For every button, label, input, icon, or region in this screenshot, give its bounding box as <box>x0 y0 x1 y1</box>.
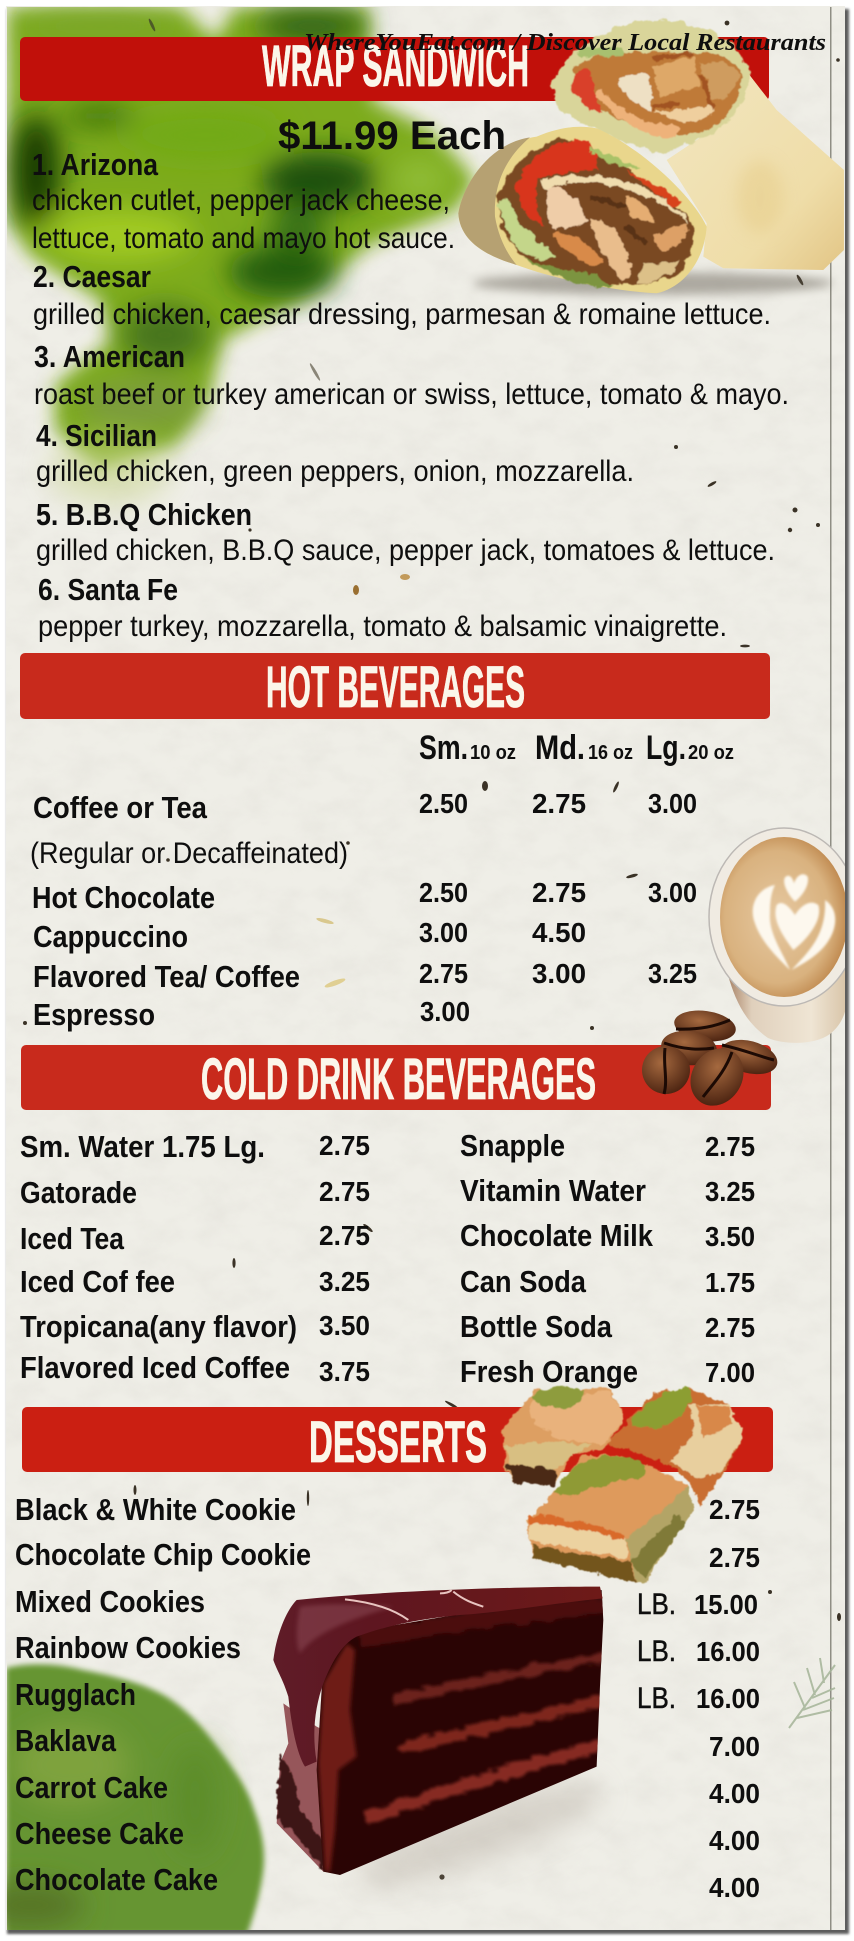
price: $11.99 each: $11.99 Each <box>278 114 506 158</box>
list: cold drinks left column: Tropicana(any flavor) <box>20 1309 297 1344</box>
item 1 description: chicken cutlet, pepper jack cheese, <box>32 184 450 217</box>
list: desserts prices: 15.00 <box>694 1589 758 1620</box>
item 4 name: 4. Sicilian <box>36 418 157 453</box>
row: hot chocolate <box>32 877 697 915</box>
list: desserts names: Cheese Cake <box>15 1816 184 1851</box>
list: cold drinks right column <box>460 1128 755 1389</box>
note: regular or decaf: (Regular or Decaffeinated) <box>30 837 348 870</box>
list: cold drinks left column: 2.75 <box>319 1220 370 1251</box>
front wrap filling <box>497 138 694 287</box>
table: hot beverages <box>30 788 697 1032</box>
watermark: WhereYouEat.com / Discover Local Restaurants <box>304 30 826 56</box>
item 4 description: grilled chicken, green peppers, onion, mozzarella. <box>36 455 634 488</box>
list: cold drinks right column: 2.75 <box>705 1131 755 1162</box>
front piece <box>527 1455 693 1583</box>
image: two wraps <box>458 20 844 295</box>
list: cold drinks right column: Fresh Orange <box>460 1354 638 1389</box>
list: desserts names: Rugglach <box>15 1677 136 1712</box>
list: cold drinks right column: 3.25 <box>705 1176 755 1207</box>
table header: sizes: Lg. <box>646 729 686 767</box>
banner: hot beverages <box>20 653 770 720</box>
table header: sizes <box>419 729 734 767</box>
list: cold drinks right column: Bottle Soda <box>460 1309 613 1344</box>
list: cold drinks left column: 3.75 <box>319 1356 370 1387</box>
row: cappuccino <box>33 917 586 954</box>
cake side face <box>277 1703 337 1872</box>
banner: desserts <box>22 1407 773 1475</box>
icing <box>273 1587 603 1767</box>
list: desserts names: Chocolate Cake <box>15 1862 218 1897</box>
list: wrap sandwich items <box>32 147 789 643</box>
base leaf shape <box>8 8 475 470</box>
row: flavored tea: 3.00 <box>532 958 586 989</box>
list: cold drinks right column: 3.50 <box>705 1221 755 1252</box>
table header: sizes: Md. <box>535 729 585 767</box>
image: coffee cup <box>709 828 854 1043</box>
row: flavored tea <box>33 958 697 994</box>
row: coffee or tea: 2.50 <box>419 788 468 819</box>
list: cold drinks left column: Flavored Iced Coffee <box>20 1350 290 1385</box>
table header: sizes: 10 oz <box>470 742 516 764</box>
back wrap body <box>667 73 844 270</box>
back wrap filling <box>552 20 750 154</box>
list: cold drinks left column: 2.75 <box>319 1130 370 1161</box>
row: espresso <box>33 996 470 1032</box>
item 5 description: grilled chicken, B.B.Q sauce, pepper jack, tomatoes & lettuce. <box>36 534 775 567</box>
item 6 name: 6. Santa Fe <box>38 572 178 607</box>
table header: sizes: 16 oz <box>588 742 633 764</box>
row: cappuccino: 3.00 <box>419 917 468 948</box>
list: cold drinks right column: Snapple <box>460 1128 565 1163</box>
list: cold drinks left column: 3.50 <box>319 1310 370 1341</box>
image: baklava <box>502 1387 745 1583</box>
row: hot chocolate: 2.50 <box>419 877 468 908</box>
list: cold drinks left column: Gatorade <box>20 1175 137 1210</box>
item 2 description: grilled chicken, caesar dressing, parmesan & romaine lettuce. <box>33 298 771 331</box>
green blurred leaf background, bottom left <box>0 1664 264 1935</box>
list: desserts prices: 2.75 <box>709 1542 760 1573</box>
left piece <box>502 1387 625 1486</box>
banner: wrap sandwich: WRAP SANDWICH <box>262 34 529 99</box>
item 1 name: 1. Arizona <box>32 147 159 182</box>
row: coffee or tea <box>33 788 697 825</box>
item 1 description: lettuce, tomato and mayo hot sauce. <box>32 222 455 255</box>
row: coffee or tea: 2.75 <box>532 788 586 819</box>
list: desserts prices: LB. <box>637 1588 676 1621</box>
row: flavored tea: 2.75 <box>419 958 468 989</box>
image: coffee beans <box>642 1007 781 1116</box>
row: espresso: 3.00 <box>420 996 470 1027</box>
row: cappuccino: Cappuccino <box>33 919 188 954</box>
list: cold drinks right column: Vitamin Water <box>460 1173 646 1208</box>
row: espresso: Espresso <box>33 997 155 1032</box>
row: hot chocolate: Hot Chocolate <box>32 880 215 915</box>
cake front face <box>317 1590 603 1875</box>
table header: sizes: Sm. <box>419 729 468 767</box>
table header: sizes: 20 oz <box>688 742 734 764</box>
list: cold drinks left column: Iced Cof fee <box>20 1264 175 1299</box>
list: desserts names: Chocolate Chip Cookie <box>15 1537 311 1572</box>
right piece <box>607 1388 745 1507</box>
banner: cold drink beverages <box>21 1045 771 1112</box>
list: desserts names <box>15 1492 311 1897</box>
list: desserts prices: 2.75 <box>709 1494 760 1525</box>
row: coffee or tea: 3.00 <box>648 788 697 819</box>
list: desserts prices: 7.00 <box>709 1731 760 1762</box>
list: desserts names: Mixed Cookies <box>15 1584 205 1619</box>
list: cold drinks right column: 7.00 <box>705 1357 755 1388</box>
row: cappuccino: 4.50 <box>532 917 586 948</box>
list: cold drinks left column: 2.75 <box>319 1176 370 1207</box>
banner: desserts: DESSERTS <box>309 1410 487 1475</box>
item 3 name: 3. American <box>34 339 185 374</box>
row: hot chocolate: 2.75 <box>532 877 586 908</box>
item 6 description: pepper turkey, mozzarella, tomato & balsamic vinaigrette. <box>38 610 727 643</box>
list: desserts prices: LB. <box>637 1682 676 1715</box>
decoration: rosemary sprig <box>789 1658 835 1728</box>
list: desserts prices: 4.00 <box>709 1872 760 1903</box>
row: flavored tea: Flavored Tea/ Coffee <box>33 959 300 994</box>
item 5 name: 5. B.B.Q Chicken <box>36 497 252 532</box>
list: desserts names: Rainbow Cookies <box>15 1630 241 1665</box>
list: desserts prices: 4.00 <box>709 1825 760 1856</box>
list: desserts names: Baklava <box>15 1723 117 1758</box>
list: cold drinks right column: Can Soda <box>460 1264 587 1299</box>
green blurred leaf background, top left <box>8 8 475 504</box>
list: desserts prices: LB. <box>637 1635 676 1668</box>
front wrap outer skin <box>458 127 707 293</box>
list: cold drinks left column: Sm. Water 1.75 Lg. <box>20 1129 265 1164</box>
list: cold drinks left column: 3.25 <box>319 1266 370 1297</box>
row: hot chocolate: 3.00 <box>648 877 697 908</box>
cake stripes <box>318 1605 607 1872</box>
list: cold drinks left column <box>20 1129 370 1387</box>
row: flavored tea: 3.25 <box>648 958 697 989</box>
item 1 description <box>32 184 455 255</box>
list: cold drinks right column: 2.75 <box>705 1312 755 1343</box>
list: cold drinks left column: Iced Tea <box>20 1221 125 1256</box>
image: chocolate cake <box>273 1587 612 1906</box>
list: cold drinks right column: Chocolate Milk <box>460 1218 654 1253</box>
item 2 name: 2. Caesar <box>33 259 151 294</box>
list: cold drinks right column: 1.75 <box>705 1267 755 1298</box>
banner: wrap sandwich <box>20 34 769 101</box>
list: desserts prices: 16.00 <box>696 1683 760 1714</box>
list: desserts names: Carrot Cake <box>15 1770 168 1805</box>
row: coffee or tea: Coffee or Tea <box>33 790 208 825</box>
banner: hot beverages: HOT BEVERAGES <box>266 655 525 720</box>
list: desserts prices: 4.00 <box>709 1778 760 1809</box>
list: desserts prices <box>637 1494 760 1903</box>
item 3 description: roast beef or turkey american or swiss, lettuce, tomato & mayo. <box>34 378 789 411</box>
latte art <box>753 874 835 970</box>
list: desserts names: Black & White Cookie <box>15 1492 296 1527</box>
list: desserts prices: 16.00 <box>696 1636 760 1667</box>
